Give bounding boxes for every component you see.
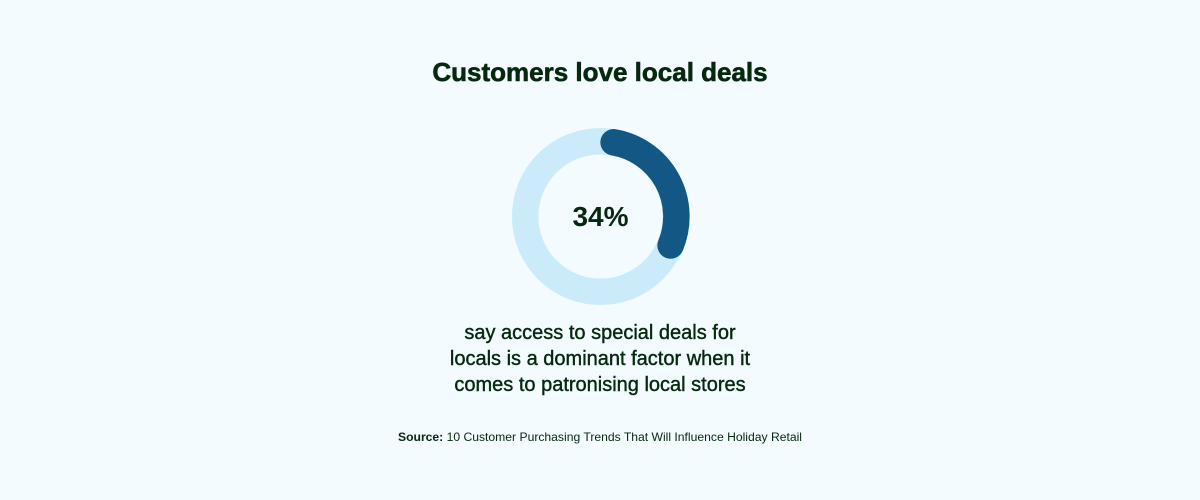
donut track: [525, 141, 676, 292]
description text: say access to special deals for: [464, 322, 736, 344]
donut value arc: [614, 142, 676, 246]
source note: Source: 10 Customer Purchasing Trends That Will Influence Holiday Retail: [398, 430, 802, 444]
description text: locals is a dominant factor when it: [450, 348, 750, 370]
donut chart: 34%: [512, 128, 690, 305]
percentage value: 34%: [572, 201, 629, 232]
description text: comes to patronising local stores: [454, 374, 746, 396]
title: Customers love local deals: [432, 57, 768, 87]
description text: [450, 322, 750, 396]
